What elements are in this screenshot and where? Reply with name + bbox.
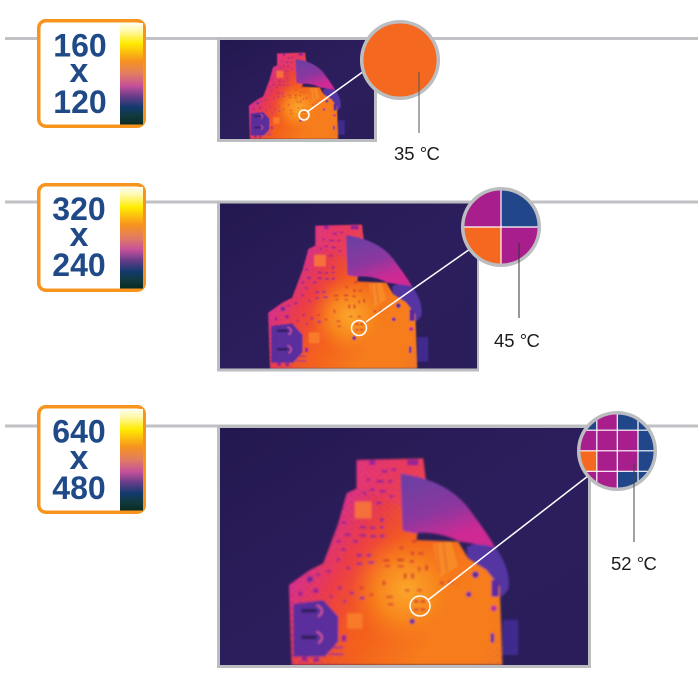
row 1: 160 x 120 resolution <box>5 21 698 164</box>
leader line 2 <box>518 243 520 318</box>
thermal image 3 <box>218 426 590 666</box>
resolution legend 640x480: 640 <box>52 414 106 450</box>
thermal image 2 <box>218 202 478 370</box>
resolution legend 320x240: 240 <box>52 247 106 283</box>
resolution legend 640x480: x <box>70 439 89 477</box>
temperature 35 C: 35 °C <box>394 143 440 164</box>
rule line 1 <box>5 37 698 40</box>
resolution legend 320x240 <box>39 185 144 290</box>
resolution legend 320x240: x <box>70 216 89 254</box>
pointer line and marker 2 <box>352 249 470 336</box>
resolution legend 320x240: 320 <box>52 191 106 227</box>
resolution legend 160x120: x <box>70 52 89 90</box>
row 2: 320 x 240 resolution <box>5 185 698 370</box>
resolution legend 640x480 <box>39 407 144 512</box>
thermal image 1 <box>218 38 376 140</box>
magnified pixel circle 1 <box>362 22 438 98</box>
pointer line and marker 1 <box>299 71 364 120</box>
temperature 52 C: 52 °C <box>611 553 657 574</box>
leader line 1 <box>418 72 420 133</box>
pointer line and marker 3 <box>410 476 588 616</box>
resolution legend 160x120: 160 <box>53 28 107 64</box>
leader line 3 <box>633 463 635 542</box>
magnified pixel circle 2 <box>461 187 541 267</box>
rule line 2 <box>5 200 698 204</box>
magnified pixel circle 3 <box>577 411 657 491</box>
resolution legend 160x120: 120 <box>53 84 107 120</box>
resolution legend 640x480: 480 <box>52 470 106 506</box>
resolution legend 160x120 <box>39 21 144 126</box>
rule line 3 <box>5 424 698 428</box>
temperature 45 C: 45 °C <box>494 330 540 351</box>
row 3: 640 x 480 resolution <box>5 407 698 666</box>
